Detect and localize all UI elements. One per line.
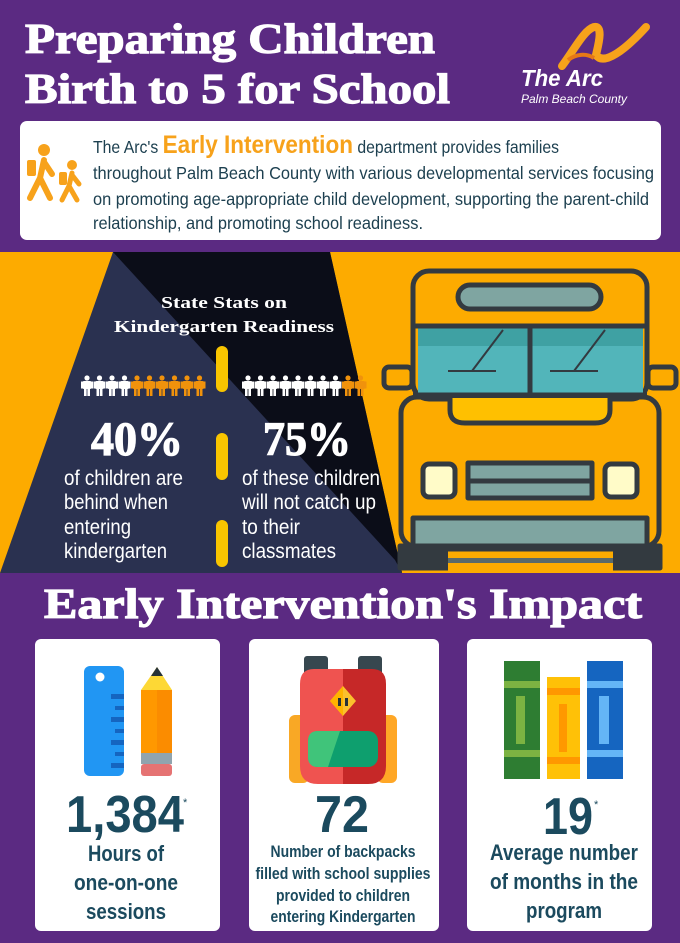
icon: books: [504, 661, 623, 779]
intro panel: [20, 121, 661, 240]
logo: The Arc Palm Beach County: Palm Beach County: [521, 92, 628, 106]
card: months: [467, 639, 652, 931]
icon: school bus: [384, 271, 676, 573]
title: [25, 17, 450, 113]
card: hours: *: [183, 797, 188, 809]
card: months: Average number: [490, 840, 638, 865]
stat: 40%: entering: [64, 516, 131, 539]
title: Birth to 5 for School: [25, 67, 450, 113]
stat: 75%: will not catch up: [241, 491, 376, 514]
panel: state stats band: Kindergarten Readiness: [114, 317, 334, 336]
card: backpacks: 72: [315, 786, 369, 844]
intro panel: throughout Palm Beach County with various developmental services focusing: [93, 163, 654, 183]
stat: 75%: to their: [242, 516, 300, 539]
logo: The Arc Palm Beach County: The Arc: [521, 65, 603, 91]
panel: state stats band: [0, 252, 680, 573]
icon: people row 75%: [242, 375, 366, 396]
stat: 75%: of these children: [242, 467, 380, 490]
card: months: 19: [543, 788, 593, 846]
intro panel: The Arc's Early Intervention department provides families: [93, 131, 559, 159]
stat: 40%: 40%: [91, 413, 183, 466]
icon: ruler and pencil: [84, 666, 172, 776]
icon: backpack: [289, 656, 397, 784]
card: backpacks: Number of backpacks: [270, 842, 416, 861]
stat: 75%: [241, 413, 380, 563]
heading: Early Intervention's Impact: Early Intervention's Impact: [44, 582, 642, 628]
card: backpacks: filled with school supplies: [256, 864, 430, 883]
intro panel: on promoting age-appropriate child development, supporting the parent-child: [93, 189, 649, 209]
stat: 40%: [64, 413, 183, 563]
card: months: program: [526, 898, 602, 923]
card: backpacks: [249, 639, 439, 931]
card: hours: 1,384: [66, 786, 184, 844]
stat: 40%: of children are: [64, 467, 183, 490]
logo: The Arc Palm Beach County: [521, 27, 646, 106]
card: hours: [35, 639, 220, 931]
card: hours: sessions: [86, 899, 166, 924]
card: months: *: [594, 799, 599, 811]
intro panel: relationship, and promoting school readiness.: [93, 213, 423, 233]
title: Preparing Children: [25, 17, 435, 63]
stat: 75%: 75%: [263, 413, 351, 466]
stat: 40%: behind when: [64, 491, 168, 514]
card: hours: one-on-one: [74, 870, 178, 895]
card: months: of months in the: [490, 869, 638, 894]
icon: walking people: [27, 144, 79, 200]
stat: 40%: kindergarten: [64, 540, 167, 563]
card: backpacks: entering Kindergarten: [270, 907, 416, 926]
card: hours: Hours of: [88, 841, 165, 866]
divider dashes: [216, 346, 228, 567]
card: backpacks: provided to children: [276, 886, 410, 905]
stat: 75%: classmates: [242, 540, 336, 563]
heading: state stats: State Stats on: [161, 293, 288, 312]
icon: people row 40%: [81, 375, 206, 396]
